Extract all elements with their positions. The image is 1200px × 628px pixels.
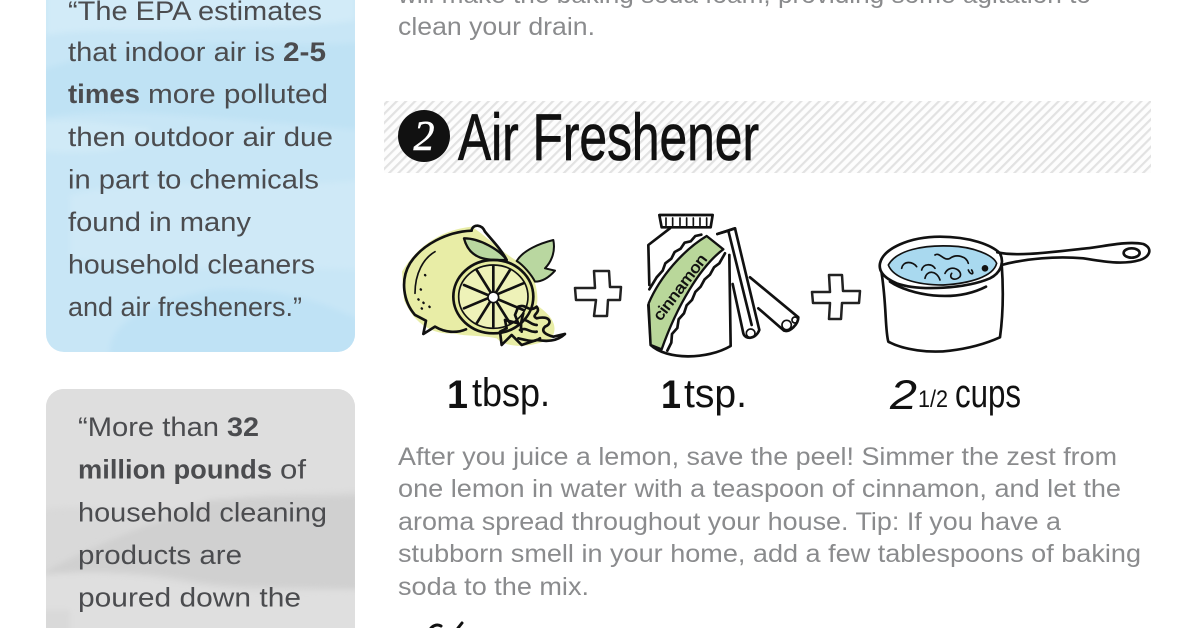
text block: end of drain cleaner instructions: clean your drain. xyxy=(398,13,595,41)
icon: lemon leaves xyxy=(464,238,555,282)
text block: air freshener instructions: one lemon in water with a teaspoon of cinnamon, and let the xyxy=(398,475,1121,503)
text block: cleaning products quote lines: products are xyxy=(78,540,242,570)
icon: number 2 badge xyxy=(398,110,450,162)
text block: EPA quote lines: in part to chemicals xyxy=(68,164,319,194)
icon: cinnamon jar and sticks xyxy=(648,215,798,356)
panel: EPA indoor air quote xyxy=(40,0,360,360)
text block: EPA quote lines: that indoor air is xyxy=(68,37,275,67)
text block: EPA quote lines: and air fresheners.” xyxy=(68,292,302,322)
text block: cleaning products quote lines: “More than xyxy=(78,412,219,442)
icon: lemon xyxy=(402,226,565,346)
icon: lemon slice xyxy=(453,260,533,333)
label: 1 tablespoon: tbsp. xyxy=(472,371,550,415)
text block: cleaning products quote lines: million pounds xyxy=(78,454,272,484)
icon: cinnamon sticks xyxy=(717,228,798,338)
icon: pan body xyxy=(882,263,1003,352)
panel: household cleaning products quote xyxy=(40,385,360,628)
text block: cleaning products quote lines: of xyxy=(280,454,307,484)
icon: number 2 badge: 2 xyxy=(414,114,434,160)
text block: cleaning products quote lines: 32 xyxy=(227,412,259,442)
text block: EPA quote lines xyxy=(68,0,333,322)
text block: EPA quote lines: then outdoor air due xyxy=(68,122,333,152)
text block: cleaning products quote lines xyxy=(78,412,327,612)
icon: top of next section heading, cropped xyxy=(431,623,462,628)
label: 2 and a half cups: 1/2 xyxy=(918,386,948,413)
label: 2 and a half cups: cups xyxy=(955,372,1021,416)
text block: air freshener instructions: After you juice a lemon, save the peel! Simmer the zest from xyxy=(398,443,1117,471)
icon: pan rim and water xyxy=(880,237,1002,288)
text block: EPA quote lines: more polluted xyxy=(148,79,328,109)
text block: air freshener instructions: soda to the mix. xyxy=(398,573,589,601)
text block: air freshener instructions: stubborn smell in your home, add a few tablespoons of baking xyxy=(398,540,1141,568)
text block: air freshener instructions xyxy=(398,443,1141,601)
label: 2 and a half cups xyxy=(889,371,1021,418)
heading: Air Freshener: Air Freshener xyxy=(458,100,759,174)
label: cinnamon: cinnamon xyxy=(650,251,711,324)
label: 1 teaspoon: 1 xyxy=(661,373,681,417)
icon: plus sign one xyxy=(575,271,621,316)
label: 1 teaspoon: tsp. xyxy=(684,372,747,416)
label: 1 tablespoon: 1 xyxy=(447,373,468,417)
label: 2 and a half cups: 2 xyxy=(889,371,917,418)
text block: EPA quote lines: times xyxy=(68,79,140,109)
text block: end of drain cleaner instructions xyxy=(397,0,1091,41)
label: 1 tablespoon xyxy=(447,371,550,417)
text block: cleaning products quote lines: poured down the xyxy=(78,582,301,612)
text block: EPA quote lines: household cleaners xyxy=(68,250,315,280)
icon: plus sign two xyxy=(812,275,860,319)
text block: air freshener instructions: aroma spread throughout your house. Tip: If you have a xyxy=(398,508,1061,536)
icon: pan handle xyxy=(997,243,1149,265)
icon: jar body xyxy=(648,215,731,356)
text block: EPA quote lines: 2-5 xyxy=(283,37,326,67)
icon: lemon zest pile xyxy=(500,306,565,345)
icon: saucepan of water xyxy=(880,237,1149,352)
heading: Air Freshener xyxy=(384,100,1151,174)
text block: cleaning products quote lines: household cleaning xyxy=(78,498,327,528)
text block: EPA quote lines: found in many xyxy=(68,207,252,237)
